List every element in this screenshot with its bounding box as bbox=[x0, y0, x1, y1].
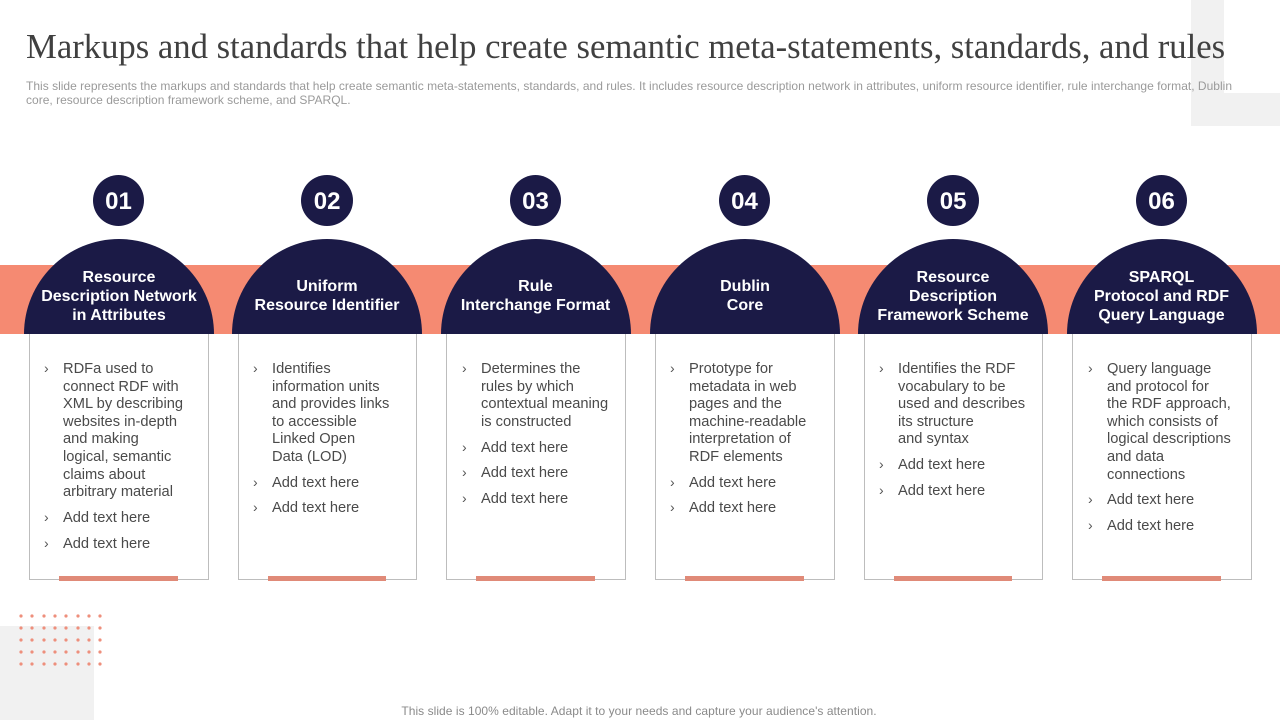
heading: Dublin bbox=[720, 278, 770, 294]
semicircle header shape bbox=[858, 239, 1048, 334]
panel: 02 Uniform Resource Identifier bbox=[232, 175, 422, 581]
panel: 02 Uniform Resource Identifier: › bbox=[253, 499, 258, 515]
heading: in Attributes bbox=[72, 307, 166, 324]
content card bbox=[446, 334, 626, 580]
bullet: add text: Add text here bbox=[63, 536, 150, 552]
heading bbox=[1094, 269, 1229, 324]
panel: 01 Resource Description Network in Attributes: › bbox=[44, 360, 49, 376]
panel: 03 Rule Interchange Format: › bbox=[462, 490, 467, 506]
bullet: description: XML by describing bbox=[63, 396, 183, 412]
bullet: add text: Add text here bbox=[1107, 518, 1194, 534]
bullet: description bbox=[879, 360, 1025, 447]
bullet: description: pages and the bbox=[689, 396, 782, 412]
content card bbox=[864, 334, 1043, 580]
bullet: description: vocabulary to be bbox=[898, 379, 1006, 395]
bullet: description: logical descriptions bbox=[1107, 431, 1231, 447]
bullet: description: interpretation of bbox=[689, 431, 791, 447]
bullet: add text: Add text here bbox=[689, 500, 776, 516]
bullet: description bbox=[44, 360, 183, 500]
number badge 04 bbox=[719, 175, 770, 226]
content card bbox=[29, 334, 209, 580]
bullet: description: the RDF approach, bbox=[1107, 396, 1231, 412]
content card bbox=[655, 334, 835, 580]
number badge 02 bbox=[301, 175, 353, 226]
bullet: description: Query language bbox=[1107, 361, 1211, 377]
bullet: description: RDFa used to bbox=[63, 361, 153, 377]
heading bbox=[255, 278, 400, 314]
bullet: description: and provides links bbox=[272, 396, 389, 412]
decorative corner block: bottom left bbox=[0, 626, 94, 720]
bullet: description bbox=[1088, 360, 1231, 483]
bullet: description: and syntax bbox=[898, 431, 969, 447]
semicircle header shape bbox=[1067, 239, 1256, 334]
subtitle description: core, resource description framework scheme, and SPARQL. bbox=[26, 93, 351, 107]
bullet: description: used and describes bbox=[898, 396, 1025, 412]
panel: 04 Dublin Core: › bbox=[670, 499, 675, 515]
bullet: description bbox=[462, 360, 608, 430]
panel: 03 Rule Interchange Format: › bbox=[462, 360, 467, 376]
panel: 04 Dublin Core: › bbox=[670, 474, 675, 490]
bullet: description bbox=[670, 360, 806, 465]
panel: 04 Dublin Core: › bbox=[670, 360, 675, 376]
heading: Protocol and RDF bbox=[1094, 288, 1229, 305]
heading: Framework Scheme bbox=[877, 307, 1029, 324]
dot pattern bbox=[19, 614, 102, 666]
number badge 03 bbox=[510, 175, 561, 226]
number badge 06 bbox=[1136, 175, 1187, 226]
card accent bar bbox=[476, 576, 595, 581]
panel: 04 Dublin Core bbox=[650, 175, 840, 581]
heading: Resource Identifier bbox=[255, 296, 399, 314]
heading bbox=[877, 269, 1029, 324]
heading: Core bbox=[727, 296, 763, 314]
bullet: add text: Add text here bbox=[272, 475, 359, 491]
bullet: add text: Add text here bbox=[689, 475, 776, 491]
panel: 02 Uniform Resource Identifier: › bbox=[253, 360, 258, 376]
bullet: description: metadata in web bbox=[689, 379, 797, 395]
bullet: add text: Add text here bbox=[1107, 492, 1194, 508]
bullet: description: and protocol for bbox=[1107, 379, 1209, 395]
panel: 03 Rule Interchange Format: › bbox=[462, 464, 467, 480]
bullet: description: Data (LOD) bbox=[272, 449, 347, 465]
card accent bar bbox=[268, 576, 386, 581]
heading: Rule bbox=[518, 278, 553, 294]
card accent bar bbox=[59, 576, 178, 581]
heading: Resource bbox=[83, 269, 155, 286]
bullet: description: Identifies the RDF bbox=[898, 361, 1015, 377]
card accent bar bbox=[1102, 576, 1221, 581]
bullet: description: its structure bbox=[898, 414, 974, 430]
panel: 05 Resource Description Framework Scheme: › bbox=[879, 456, 884, 472]
card accent bar bbox=[894, 576, 1012, 581]
panel: 03 Rule Interchange Format bbox=[441, 175, 631, 581]
bullet: description: Linked Open bbox=[272, 431, 355, 447]
bullet: description: information units bbox=[272, 379, 380, 395]
number badge 05: 05 bbox=[940, 188, 966, 215]
bullet: add text: Add text here bbox=[898, 457, 985, 473]
heading: Interchange Format bbox=[461, 296, 610, 314]
footer note: This slide is 100% editable. Adapt it to your needs and capture your audience's attention. bbox=[401, 704, 877, 718]
coral horizontal band bbox=[0, 265, 1280, 334]
decorative corner block: top right bbox=[1191, 0, 1224, 126]
bullet: description: claims about bbox=[63, 467, 145, 483]
heading: Description bbox=[909, 288, 997, 305]
heading: Resource bbox=[917, 269, 989, 286]
heading: Query Language bbox=[1098, 307, 1225, 324]
title: Markups and standards that help create semantic meta-statements, standards, and rules bbox=[26, 28, 1225, 66]
bullet: description: rules by which bbox=[481, 379, 574, 395]
bullet: description: RDF elements bbox=[689, 449, 783, 465]
number badge 01 bbox=[93, 175, 144, 226]
panel: 01 Resource Description Network in Attributes bbox=[24, 175, 214, 581]
panel: 06 SPARQL Protocol and RDF Query Language: › bbox=[1088, 360, 1093, 376]
number badge 01: 01 bbox=[105, 188, 132, 215]
number badge 05 bbox=[927, 175, 979, 226]
bullet: description: contextual meaning bbox=[481, 396, 608, 412]
panel: 06 SPARQL Protocol and RDF Query Language bbox=[1067, 175, 1257, 581]
heading bbox=[461, 278, 610, 314]
semicircle header shape bbox=[441, 239, 630, 334]
number badge 03: 03 bbox=[522, 188, 549, 215]
bullet: description: logical, semantic bbox=[63, 449, 171, 465]
panel: 05 Resource Description Framework Scheme: › bbox=[879, 482, 884, 498]
content card bbox=[1072, 334, 1252, 580]
bullet: add text: Add text here bbox=[481, 440, 568, 456]
bullet: description: and making bbox=[63, 431, 139, 447]
bullet: description: machine-readable bbox=[689, 414, 806, 430]
semicircle header shape bbox=[650, 239, 840, 334]
bullet: description: which consists of bbox=[1107, 414, 1218, 430]
panel: 05 Resource Description Framework Scheme bbox=[858, 175, 1048, 581]
bullet: description: is constructed bbox=[481, 414, 571, 430]
heading: Description Network bbox=[41, 288, 197, 305]
content card bbox=[238, 334, 417, 580]
bullet: add text: Add text here bbox=[63, 510, 150, 526]
heading bbox=[720, 278, 770, 314]
decorative corner block: top right horizontal bbox=[1191, 93, 1280, 126]
subtitle description bbox=[26, 79, 1232, 107]
number badge 02: 02 bbox=[314, 188, 340, 215]
semicircle header shape bbox=[24, 239, 214, 334]
panel: 01 Resource Description Network in Attributes: › bbox=[44, 535, 49, 551]
panel: 06 SPARQL Protocol and RDF Query Language: › bbox=[1088, 517, 1093, 533]
subtitle description: This slide represents the markups and standards that help create semantic meta-statements, standards, and rules. It includes resource description network in attributes, uniform resource identifier, rule interchange format, Dublin bbox=[26, 79, 1232, 93]
panel: 02 Uniform Resource Identifier: › bbox=[253, 474, 258, 490]
heading bbox=[41, 269, 197, 324]
bullet: description: connect RDF with bbox=[63, 379, 179, 395]
bullet: add text: Add text here bbox=[272, 500, 359, 516]
bullet: description: to accessible bbox=[272, 414, 357, 430]
heading: SPARQL bbox=[1129, 269, 1194, 286]
panel: 06 SPARQL Protocol and RDF Query Language: › bbox=[1088, 491, 1093, 507]
panel: 03 Rule Interchange Format: › bbox=[462, 439, 467, 455]
semicircle header shape bbox=[232, 239, 422, 334]
card accent bar bbox=[685, 576, 804, 581]
bullet: description: Determines the bbox=[481, 361, 580, 377]
number badge 04: 04 bbox=[731, 188, 758, 215]
bullet: description: websites in-depth bbox=[63, 414, 177, 430]
bullet: add text: Add text here bbox=[898, 483, 985, 499]
bullet: description bbox=[253, 360, 389, 465]
bullet: add text: Add text here bbox=[481, 491, 568, 507]
bullet: description: Identifies bbox=[272, 361, 331, 377]
bullet: description: Prototype for bbox=[689, 361, 773, 377]
panel: 05 Resource Description Framework Scheme: › bbox=[879, 360, 884, 376]
heading: Uniform bbox=[296, 278, 358, 294]
panel: 01 Resource Description Network in Attributes: › bbox=[44, 509, 49, 525]
bullet: description: arbitrary material bbox=[63, 484, 173, 500]
bullet: add text: Add text here bbox=[481, 465, 568, 481]
bullet: description: connections bbox=[1107, 467, 1185, 483]
bullet: description: and data bbox=[1107, 449, 1164, 465]
number badge 06: 06 bbox=[1148, 188, 1175, 215]
